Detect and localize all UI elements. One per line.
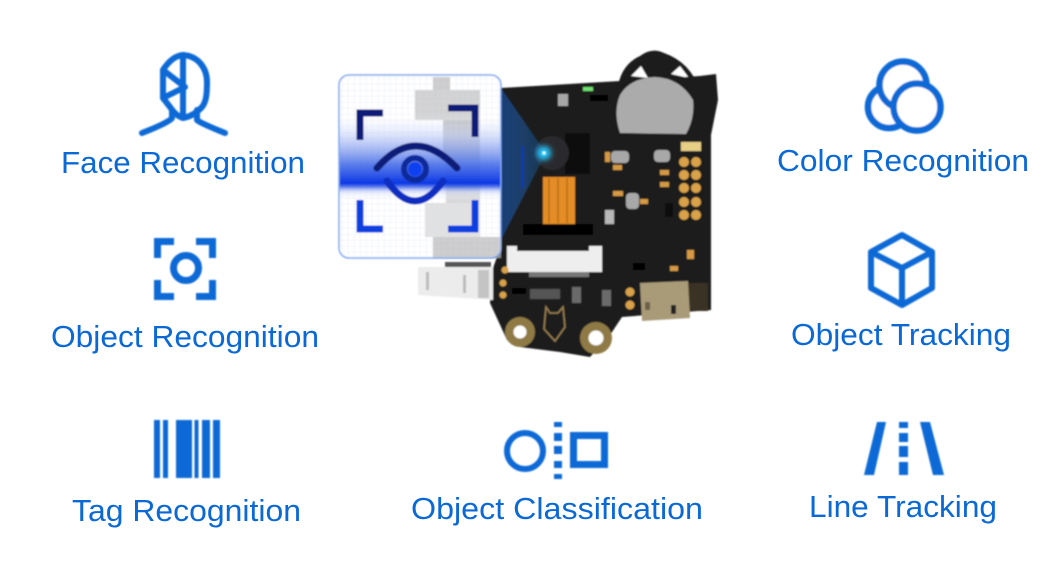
eye icon (377, 146, 457, 201)
icon: face recognition (142, 55, 225, 133)
circuit board (490, 74, 718, 357)
grey connector behind panel (415, 77, 501, 258)
translucent vision panel (339, 75, 501, 258)
battery holder ring (616, 51, 700, 130)
camera module (523, 133, 593, 235)
label: Object Classification: Object Classification (411, 491, 703, 526)
gold pads (500, 157, 701, 310)
device photo: sensor board (415, 51, 718, 357)
icon: object recognition (158, 242, 212, 296)
label: Tag Recognition: Tag Recognition (72, 493, 301, 528)
icon: tag barcode (154, 420, 220, 478)
vision projection cone (501, 88, 546, 240)
components (512, 87, 701, 306)
icon: object tracking cube (871, 235, 932, 305)
label: Face Recognition: Face Recognition (61, 145, 305, 180)
coin cell (616, 77, 693, 134)
icon: line tracking road (864, 422, 944, 475)
label: Object Tracking: Object Tracking (791, 317, 1011, 352)
white JST connector (418, 262, 493, 300)
icon: object classification (507, 422, 604, 479)
camera glow (537, 146, 551, 160)
micro USB port (640, 281, 708, 321)
icon: color recognition (868, 62, 940, 130)
focus brackets (360, 108, 475, 229)
mounting holes and logo (505, 307, 612, 354)
label: Line Tracking: Line Tracking (809, 489, 997, 524)
white FPC connector (507, 246, 602, 272)
label: Color Recognition: Color Recognition (777, 143, 1029, 178)
label: Object Recognition: Object Recognition (51, 319, 319, 354)
